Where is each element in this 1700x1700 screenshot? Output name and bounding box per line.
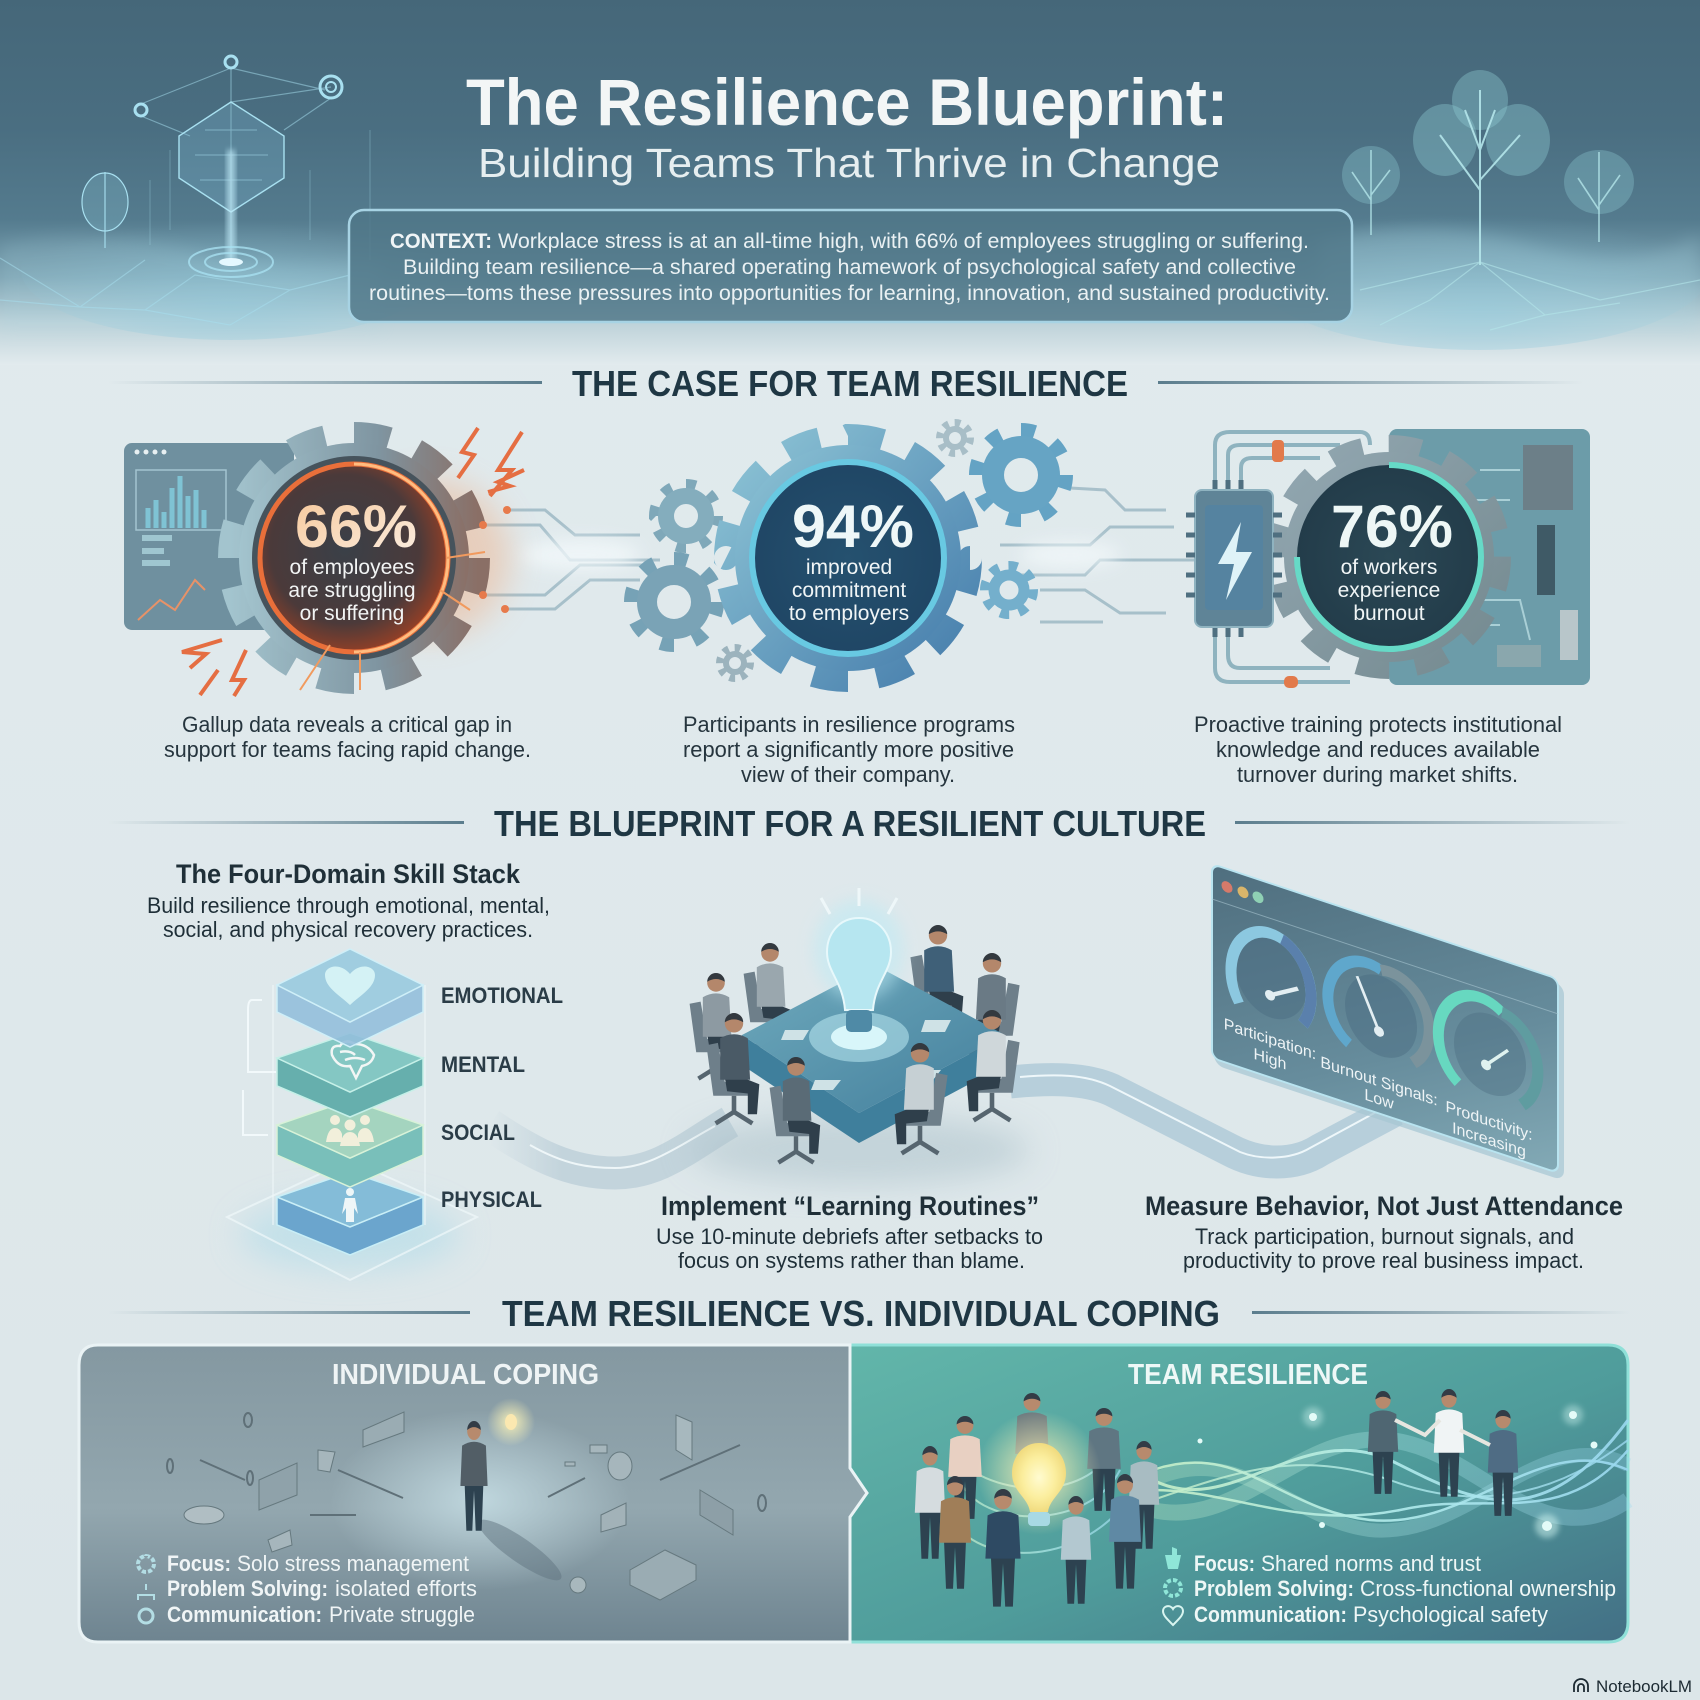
stat value and label: to employers xyxy=(789,602,909,625)
small orange wire terminals xyxy=(479,506,511,613)
section heading: team resilience vs individual coping: TEAM RESILIENCE VS. INDIVIDUAL COPING xyxy=(502,1293,1220,1334)
text: Gallup description: Gallup data reveals a critical gap in xyxy=(182,712,512,737)
layer labels: PHYSICAL xyxy=(441,1187,542,1212)
layer: mental xyxy=(277,1033,423,1117)
layer: emotional xyxy=(277,949,423,1047)
stat value and label xyxy=(288,493,417,625)
context callout: CONTEXT: xyxy=(390,230,492,253)
text: participants description: view of their company. xyxy=(741,762,955,787)
icon: glowing lightbulb xyxy=(977,1411,1101,1535)
stat value and label: or suffering xyxy=(300,602,404,625)
list: team resilience attributes: Problem Solving: xyxy=(1194,1576,1354,1601)
text: participants description: report a significantly more positive xyxy=(683,737,1014,762)
icon: heart outline xyxy=(1163,1606,1183,1625)
heading: TEAM RESILIENCE xyxy=(1128,1359,1368,1391)
list: team resilience attributes: Cross-functional ownership xyxy=(1360,1576,1616,1601)
text: four-domain skill stack: The Four-Domain Skill Stack xyxy=(176,859,521,889)
gauge: burnout signals xyxy=(1328,950,1429,1072)
icon: group of people xyxy=(326,1115,374,1146)
gauge labels: High xyxy=(1254,1045,1286,1074)
gauge ring gear xyxy=(1277,445,1501,669)
layer labels: EMOTIONAL xyxy=(441,983,563,1008)
gauge labels: Burnout Signals: xyxy=(1320,1053,1438,1110)
context callout: routines—toms these pressures into opportunities for learning, innovation, and sustained productivity. xyxy=(369,281,1330,305)
icon: brain xyxy=(332,1041,374,1078)
watermark: NotebookLM: NotebookLM xyxy=(1596,1677,1692,1696)
shadow under table xyxy=(690,1115,1030,1185)
sparkles xyxy=(1198,1405,1598,1538)
stat value and label: experience xyxy=(1338,579,1440,602)
text: implement learning routines: focus on systems rather than blame. xyxy=(678,1248,1025,1273)
text: proactive training description xyxy=(1194,712,1562,787)
title: The Resilience Blueprint: xyxy=(466,65,1228,139)
connector path: stack to table xyxy=(490,1122,730,1173)
text: proactive training description: knowledge and reduces available xyxy=(1216,737,1540,762)
stat: 76% experience burnout xyxy=(1186,429,1590,688)
icon: heart xyxy=(325,967,375,1005)
icon: lightning sparks xyxy=(182,428,524,696)
heading: INDIVIDUAL COPING xyxy=(332,1359,599,1391)
people behind the table xyxy=(690,925,1020,1079)
table xyxy=(742,965,1005,1143)
list: team resilience attributes: Focus: xyxy=(1194,1551,1255,1576)
connector path: table to dashboard xyxy=(1010,1075,1395,1162)
list: individual coping attributes: Problem Solving: xyxy=(167,1576,328,1601)
list: team resilience attributes: Communication: xyxy=(1194,1602,1347,1627)
text: participants description xyxy=(683,712,1015,787)
layer: social xyxy=(277,1100,423,1187)
text: measure behavior: Track participation, burnout signals, and xyxy=(1195,1224,1574,1249)
gauge: productivity xyxy=(1438,984,1538,1110)
stat value and label xyxy=(1331,493,1453,625)
panel: team resilience xyxy=(850,1345,1628,1642)
base glow and floor xyxy=(227,985,477,1280)
list: individual coping attributes: Focus: xyxy=(167,1551,231,1576)
stat value and label: 94% xyxy=(792,493,914,560)
icon: person xyxy=(342,1188,358,1222)
text: participants description: Participants in resilience programs xyxy=(683,712,1015,737)
gauge labels: Low xyxy=(1364,1086,1394,1113)
gauge labels: Productivity: xyxy=(1445,1098,1533,1144)
panel: individual coping xyxy=(79,1345,867,1642)
layer: physical xyxy=(277,1172,423,1255)
stat value and label: are struggling xyxy=(288,579,416,602)
gauge labels: Increasing xyxy=(1452,1119,1526,1161)
text: four-domain skill stack: Build resilience through emotional, mental, xyxy=(147,893,550,918)
context callout: Workplace stress is at an all-time high, with 66% of employees struggling or suffering. xyxy=(498,229,1309,253)
gauge labels: Participation: xyxy=(1224,1015,1316,1063)
icon: orange connectors xyxy=(1272,440,1298,688)
stat: 66% of employees xyxy=(124,428,524,696)
wires xyxy=(1215,432,1370,682)
people shaking hands xyxy=(1368,1389,1518,1516)
section heading: the case for team resilience xyxy=(108,363,1583,404)
stat value and label: improved xyxy=(806,556,892,579)
icon: power chip with lightning bolt xyxy=(1186,480,1282,637)
layer labels: MENTAL xyxy=(441,1052,525,1077)
panel: analytics screen xyxy=(124,443,294,630)
title: Building Teams That Thrive in Change xyxy=(478,140,1220,186)
scattered debris objects xyxy=(167,1412,766,1600)
illustration: digital crystal tree and network xyxy=(0,56,370,325)
text: Gallup description xyxy=(164,712,531,762)
connector wires between gears xyxy=(483,488,1195,622)
four-layer skill stack xyxy=(227,949,563,1280)
list: individual coping attributes: Private struggle xyxy=(329,1602,475,1627)
panel body xyxy=(1212,864,1564,1181)
text: implement learning routines: Implement “Learning Routines” xyxy=(661,1191,1039,1221)
section heading: the case for team resilience: THE CASE FOR TEAM RESILIENCE xyxy=(572,363,1128,404)
icon: focus xyxy=(138,1556,154,1572)
stat value and label: commitment xyxy=(792,579,906,602)
stat value and label: 76% xyxy=(1331,493,1453,560)
layer labels xyxy=(441,983,563,1212)
text: proactive training description: Proactive training protects institutional xyxy=(1194,712,1562,737)
list: individual coping attributes xyxy=(138,1551,477,1627)
icon: communication xyxy=(139,1609,153,1623)
icon: lightbulb xyxy=(814,888,904,1032)
text: measure behavior: Measure Behavior, Not Just Attendance xyxy=(1145,1191,1623,1221)
list: team resilience attributes: Shared norms and trust xyxy=(1261,1551,1481,1576)
header banner xyxy=(0,0,1700,365)
people in front of the table xyxy=(706,1010,1020,1163)
text: four-domain skill stack xyxy=(147,859,550,942)
list: team resilience attributes xyxy=(1163,1547,1616,1627)
illustration: glowing trees and mesh xyxy=(1342,70,1700,330)
list: team resilience attributes: Psychological safety xyxy=(1353,1602,1548,1627)
section heading: blueprint for a resilient culture: THE BLUEPRINT FOR A RESILIENT CULTURE xyxy=(494,803,1206,844)
illustration: team meeting around table with lightbulb xyxy=(690,888,1030,1185)
context callout: Building team resilience—a shared operating hamework of psychological safety and collective xyxy=(403,255,1296,279)
stat descriptions xyxy=(164,712,1562,787)
stat value and label: of employees xyxy=(290,556,414,579)
stat: 94% improved commitment xyxy=(632,423,1065,680)
people circle xyxy=(915,1441,1159,1607)
icon: focus xyxy=(1165,1547,1181,1569)
stat value and label: 66% xyxy=(295,493,417,560)
circuit board xyxy=(1389,429,1590,685)
energy waves xyxy=(955,1420,1628,1553)
text: proactive training description: turnover during market shifts. xyxy=(1237,762,1518,787)
title xyxy=(466,65,1228,186)
people behind the bulb xyxy=(948,1393,1121,1519)
gear with burning ring xyxy=(230,434,510,690)
layer labels: SOCIAL xyxy=(441,1120,515,1145)
dashboard panel with gauges xyxy=(1212,864,1564,1181)
text: Gallup description: support for teams facing rapid change. xyxy=(164,737,531,762)
list: individual coping attributes: Communication: xyxy=(167,1602,322,1627)
text: measure behavior: productivity to prove real business impact. xyxy=(1183,1248,1584,1273)
stat value and label: burnout xyxy=(1353,602,1425,625)
list: individual coping attributes: isolated efforts xyxy=(335,1576,477,1601)
small gears cluster xyxy=(632,423,1065,678)
text: measure behavior xyxy=(1145,1191,1623,1273)
context callout xyxy=(349,210,1352,322)
person standing alone xyxy=(460,1398,568,1589)
gauge labels xyxy=(1224,1015,1533,1163)
section heading: blueprint for a resilient culture xyxy=(108,803,1630,844)
icon: problem solving xyxy=(1165,1580,1181,1596)
large blue gear xyxy=(726,436,970,680)
text: implement learning routines: Use 10-minute debriefs after setbacks to xyxy=(656,1224,1043,1249)
list: individual coping attributes: Solo stress management xyxy=(237,1551,469,1576)
icon: problem solving xyxy=(138,1584,154,1600)
stat value and label xyxy=(789,493,914,625)
text: implement learning routines xyxy=(656,1191,1043,1273)
gauge: participation xyxy=(1231,920,1311,1031)
section heading: team resilience vs individual coping xyxy=(108,1293,1630,1334)
text: four-domain skill stack: social, and physical recovery practices. xyxy=(163,917,533,942)
stat value and label: of workers xyxy=(1341,556,1437,579)
